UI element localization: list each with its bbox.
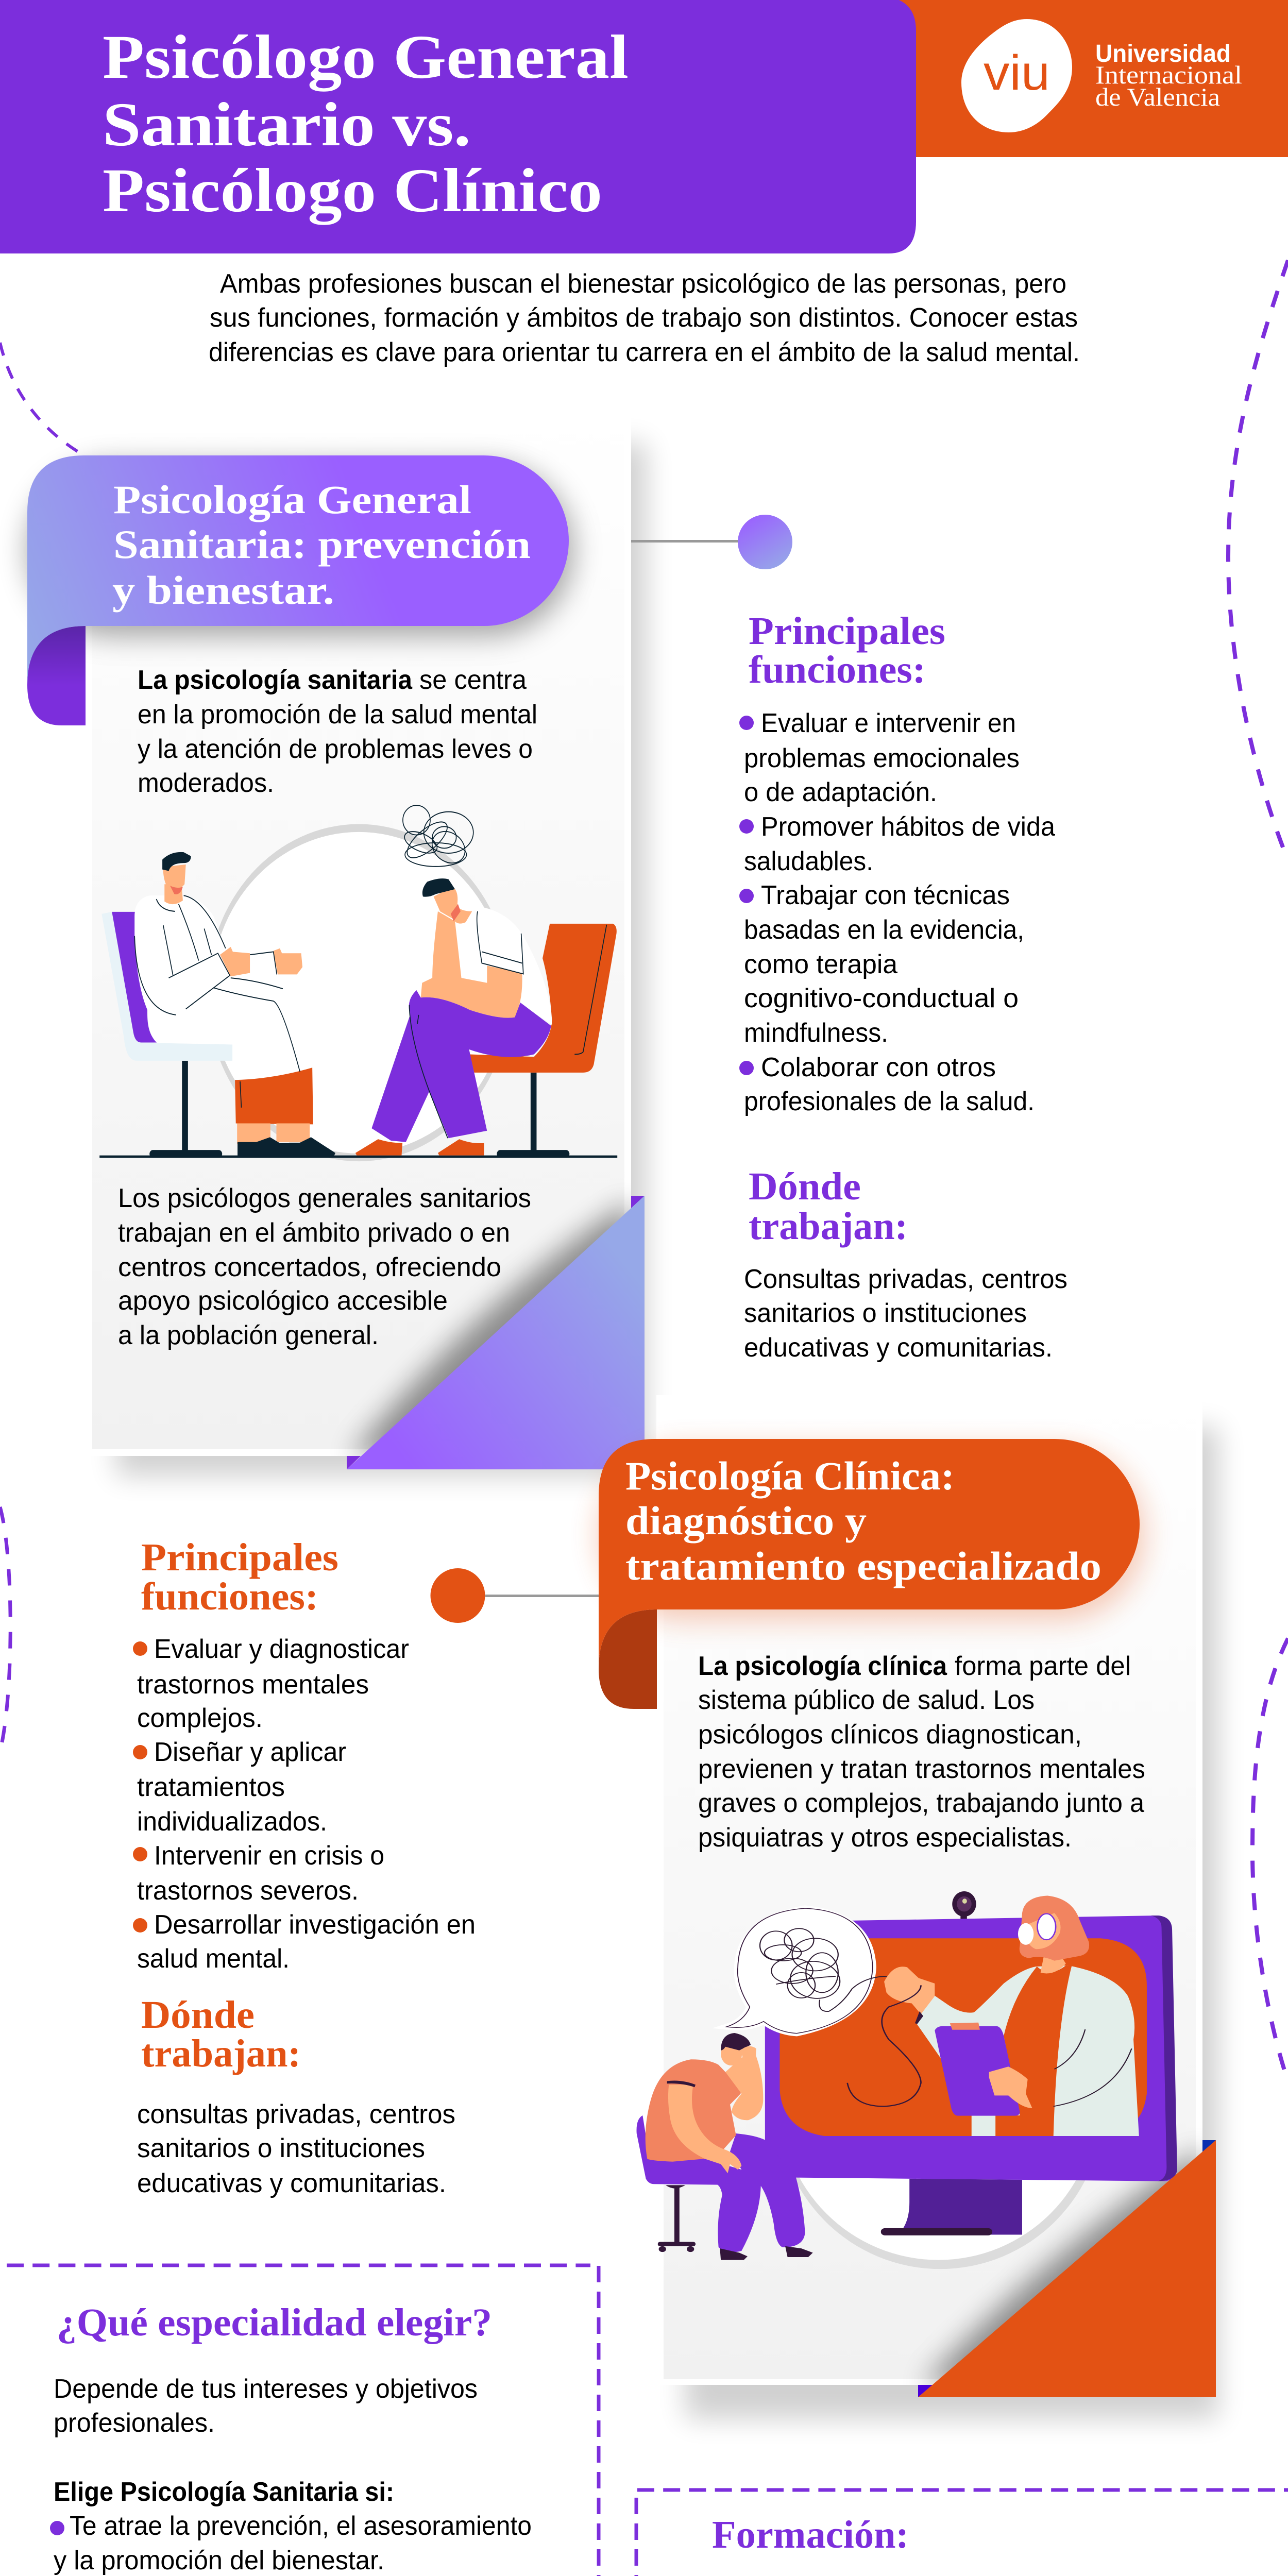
logo: Universidad Internacional de Valencia: Internacional (1095, 60, 1242, 89)
monitor (765, 1891, 1177, 2235)
intro text (209, 269, 1080, 367)
text block: intro: en la promoción de la salud mental (138, 700, 537, 730)
text block: profesionales. (54, 2408, 215, 2438)
page fold (347, 1196, 645, 1469)
banner shadow (599, 1448, 1145, 1620)
heading: Principales (749, 609, 945, 653)
heading: dónde trabajan: Dónde (141, 1993, 255, 2037)
card shadow (685, 1427, 1218, 2419)
text block: intro: La psicología clínica (698, 1651, 947, 1681)
cable (848, 1985, 921, 2106)
fold triangle (918, 2140, 1216, 2397)
banner (27, 455, 569, 685)
logo: Universidad Internacional de Valencia: viu (984, 45, 1050, 100)
text: dónde trabajan: sanitarios o instituciones (137, 2133, 425, 2163)
background circle (207, 824, 511, 1161)
doctor on screen (884, 1895, 1139, 2136)
banner heading: diagnóstico y (625, 1498, 867, 1543)
bullet list: o de adaptación. (744, 777, 937, 807)
text block: where they work (118, 1183, 531, 1350)
bullet list: Trabajar con técnicas (761, 880, 1010, 910)
dashed arc: middle right (1252, 1638, 1288, 2081)
bullet list: cognitivo-conductual o (744, 984, 1019, 1013)
bullet list: complejos. (137, 1703, 263, 1733)
text: dónde trabajan (137, 2099, 455, 2198)
panel: Psicología General Sanitaria (27, 407, 792, 1476)
floor (99, 1156, 617, 1158)
page fold (918, 2140, 1216, 2397)
text block: where they work: apoyo psicológico accesible (118, 1286, 448, 1316)
patient on stool (637, 2033, 813, 2260)
bullet list: Promover hábitos de vida (761, 812, 1055, 842)
therapist (134, 852, 335, 1158)
heading: dónde trabajan: trabajan: (749, 1205, 908, 1248)
text block: intro: La psicología sanitaria (138, 665, 413, 695)
text block: intro (138, 665, 537, 798)
text: dónde trabajan: consultas privadas, centros (137, 2099, 455, 2129)
sanitaria list: Te atrae la prevención, el asesoramiento (70, 2511, 532, 2541)
right column: funciones (739, 609, 1067, 1363)
illustration: online consultation (637, 1891, 1177, 2269)
text block: intro: sistema público de salud. Los (698, 1685, 1035, 1715)
text: dónde trabajan: educativas y comunitarias. (137, 2168, 446, 2198)
bullet list: Evaluar y diagnosticar (154, 1634, 409, 1664)
text block: Depende de tus intereses y objetivos (54, 2374, 478, 2404)
bullet list: como terapia (744, 950, 897, 979)
dashed frame (637, 2488, 1288, 2492)
logo: Universidad Internacional de Valencia: Universidad (1095, 40, 1231, 67)
text block (54, 2374, 478, 2438)
text block: where they work: Los psicólogos generales sanitarios (118, 1183, 531, 1213)
title panel (0, 0, 916, 253)
banner heading (625, 1453, 1101, 1588)
background circle (777, 1940, 1104, 2269)
text block: where they work: centros concertados, ofreciendo (118, 1252, 501, 1282)
banner heading: Sanitaria: prevención (113, 522, 531, 567)
heading (749, 609, 945, 691)
text block: intro: forma parte del (955, 1651, 1131, 1681)
banner (599, 1439, 1140, 1668)
bullet list: Intervenir en crisis o (154, 1841, 384, 1871)
heading: Formación: (712, 2513, 909, 2556)
card (86, 407, 631, 1456)
title: Psicólogo Clínico (103, 156, 602, 225)
bullet list: Colaborar con otros (761, 1053, 996, 1082)
panel: Psicología Clínica (431, 1395, 1218, 2419)
banner curl (27, 626, 86, 725)
text block: intro: moderados. (138, 768, 274, 798)
card shadow (116, 443, 647, 1476)
intro text: diferencias es clave para orientar tu carrera en el ámbito de la salud mental. (209, 337, 1080, 367)
sanitaria list (50, 2477, 532, 2576)
bullet list: salud mental. (137, 1944, 290, 1974)
bullet list: individualizados. (137, 1807, 327, 1837)
bullet list: tratamientos (137, 1772, 285, 1802)
text block: intro: previenen y tratan trastornos mentales (698, 1754, 1145, 1784)
banner heading: Psicología Clínica: (625, 1453, 955, 1498)
dashed arc: top left (0, 343, 85, 456)
intro text: sus funciones, formación y ámbitos de trabajo son distintos. Conocer estas (210, 303, 1078, 333)
connector dot (738, 515, 792, 569)
bullet list: basadas en la evidencia, (744, 915, 1024, 945)
text block: intro: graves o complejos, trabajando junto a (698, 1788, 1144, 1818)
bullet list: problemas emocionales (744, 743, 1020, 773)
intro text: Ambas profesiones buscan el bienestar psicológico de las personas, pero (220, 269, 1066, 299)
sanitaria list: Elige Psicología Sanitaria si: (54, 2477, 394, 2507)
banner shadow (27, 464, 573, 636)
text block: where they work: a la población general. (118, 1320, 379, 1350)
connector line (485, 1595, 601, 1597)
left column: funciones (133, 1536, 476, 2198)
logo: Universidad Internacional de Valencia: de Valencia (1095, 82, 1220, 111)
heading (141, 1536, 338, 1618)
bullet list: Desarrollar investigación en (154, 1910, 476, 1940)
panel: qué especialidad elegir (7, 2265, 599, 2576)
card (656, 1395, 1202, 2385)
heading: Principales (141, 1536, 338, 1579)
dashed frame (7, 2264, 590, 2267)
dashed arc: middle left (0, 1507, 10, 1752)
heading: ¿Qué especialidad elegir? (57, 2301, 492, 2344)
banner curl (599, 1609, 657, 1709)
bullet list: Diseñar y aplicar (154, 1737, 346, 1767)
illustration: therapy session (99, 805, 617, 1161)
bullet list: Evaluar e intervenir en (761, 708, 1016, 738)
scribble (402, 805, 473, 869)
bullet list (133, 1634, 476, 1974)
title (103, 23, 629, 225)
text: dónde trabajan: educativas y comunitarias. (744, 1333, 1053, 1363)
banner heading: tratamiento especializado (625, 1544, 1101, 1588)
title: Sanitario vs. (103, 90, 471, 159)
bullet list: trastornos severos. (137, 1876, 359, 1906)
text: dónde trabajan (744, 1264, 1067, 1363)
left chair (101, 912, 232, 1158)
bullet list: trastornos mentales (137, 1670, 369, 1700)
text block: intro: y la atención de problemas leves o (138, 734, 533, 764)
logo: Universidad Internacional de Valencia (961, 19, 1242, 132)
worried patient (355, 878, 552, 1156)
bullet list: mindfulness. (744, 1018, 888, 1048)
heading: dónde trabajan: trabajan: (141, 2032, 301, 2075)
connector line (631, 540, 739, 543)
text block: intro (698, 1651, 1145, 1853)
text block: intro: psiquiatras y otros especialistas. (698, 1823, 1072, 1853)
text block: intro: psicólogos clínicos diagnostican, (698, 1720, 1082, 1750)
text: dónde trabajan: sanitarios o instituciones (744, 1298, 1027, 1328)
bullet list: saludables. (744, 846, 873, 876)
header (0, 0, 1288, 253)
heading: dónde trabajan (749, 1165, 908, 1248)
banner heading (112, 477, 531, 613)
logo band (876, 0, 1288, 157)
dashed arc: top right (1228, 260, 1288, 860)
speech bubble (726, 1908, 889, 2033)
heading: dónde trabajan: Dónde (749, 1165, 861, 1208)
text block: where they work: trabajan en el ámbito privado o en (118, 1218, 510, 1248)
banner heading: y bienestar. (112, 568, 334, 613)
connector dot (431, 1568, 485, 1623)
banner heading: Psicología General (113, 477, 471, 522)
heading: dónde trabajan (141, 1993, 301, 2075)
sanitaria list: y la promoción del bienestar. (54, 2546, 384, 2575)
title: Psicólogo General (103, 23, 629, 92)
heading: funciones: (749, 648, 926, 691)
right chair (470, 924, 617, 1158)
text block: intro: se centra (419, 665, 527, 695)
bullet list: profesionales de la salud. (744, 1087, 1035, 1116)
text: dónde trabajan: Consultas privadas, centros (744, 1264, 1067, 1294)
bullet list (739, 708, 1055, 1116)
heading: funciones: (141, 1575, 318, 1618)
